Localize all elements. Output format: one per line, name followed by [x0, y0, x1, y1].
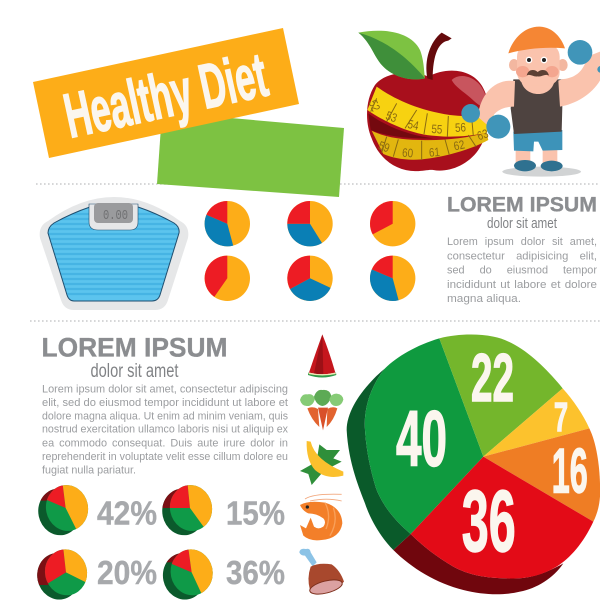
percent labels: 42%	[97, 495, 157, 532]
text block: lower left: nostrud exercitation ullamco laboris nisi ut aliquip ex	[42, 424, 288, 436]
pie 42%	[38, 485, 88, 536]
pie 3	[370, 201, 415, 246]
icon: strongman with dumbbells	[461, 27, 600, 177]
slice 36	[411, 457, 593, 579]
text block: upper right: Lorem ipsum dolor sit amet,	[447, 236, 597, 248]
text block: lower left: fugiat nulla pariatur.	[42, 464, 136, 476]
icon: apple with measuring tape: 52	[365, 98, 382, 114]
pie 20%	[37, 549, 88, 600]
label 40: 40	[396, 394, 447, 482]
icon: apple with measuring tape: 54	[406, 118, 420, 133]
icon: apple with measuring tape: 63	[476, 128, 490, 144]
text block: upper right: incididunt ut labore et dolore	[447, 279, 597, 291]
icon: banana and leaves	[300, 441, 343, 485]
percent labels: 20%	[97, 554, 157, 591]
text block: lower left: Lorem ipsum dolor sit amet, consectetur adipiscing	[42, 383, 288, 395]
text block: upper right: sed do eiusmod tempor	[447, 265, 597, 277]
pie 5	[287, 256, 333, 301]
dark red side	[393, 534, 563, 594]
text block: lower left: elit, sed do eiusmod tempor incididunt ut labore et	[42, 397, 288, 409]
percent pies	[34, 481, 223, 600]
icon: apple with measuring tape: 60	[402, 147, 413, 161]
text block: upper right: magna aliqua.	[447, 293, 521, 305]
icon: shrimp	[300, 494, 342, 540]
label 36: 36	[462, 473, 516, 570]
icon: apple with measuring tape: 56	[455, 121, 466, 135]
label 22: 22	[471, 340, 514, 416]
text block: upper right: dolor sit amet	[487, 215, 558, 232]
icon: bathroom scale	[40, 197, 188, 310]
percent labels	[97, 495, 285, 591]
text block: upper right: consectetur adipisicing elit,	[447, 250, 597, 262]
text block: lower left: dolore magna aliqua. Ut enim ad minim veniam, quis	[42, 410, 288, 422]
icon: apple with measuring tape: 62	[453, 138, 466, 154]
icon: apple with measuring tape: 59	[376, 139, 391, 156]
percent labels: 15%	[226, 495, 285, 532]
percent labels: 36%	[226, 554, 285, 591]
slice 7	[483, 388, 589, 457]
text block: lower left: LOREM IPSUM	[42, 332, 228, 362]
pie grid	[205, 201, 415, 301]
icon: apple with measuring tape: 53	[384, 109, 399, 126]
slice 16	[483, 428, 600, 522]
text block: upper right: LOREM IPSUM	[447, 194, 597, 216]
slice 40	[365, 338, 483, 534]
label 7: 7	[554, 394, 568, 440]
icon: watermelon	[308, 334, 336, 377]
pie 2	[287, 201, 333, 246]
pie 6	[370, 256, 415, 301]
pie labels	[396, 340, 588, 570]
title: Healthy Diet: Healthy Diet	[58, 40, 273, 152]
text block: lower left: ea commodo consequat. Duis aute irure dolor in	[42, 437, 288, 449]
green banner	[157, 112, 344, 197]
text block: lower left	[42, 332, 288, 476]
title banner	[33, 28, 299, 158]
icon: carrots	[300, 390, 343, 430]
icon: apple with measuring tape	[358, 31, 496, 171]
icon: ham	[299, 549, 344, 597]
pie 36%	[162, 549, 213, 600]
dark green side	[347, 368, 411, 550]
text block: lower left: reprehenderit in voluptate velit esse cillum dolore eu	[42, 451, 288, 463]
big 3D pie chart	[347, 335, 600, 594]
text block: lower left: dolor sit amet	[90, 361, 179, 382]
icon: apple with measuring tape: 55	[431, 123, 443, 137]
text block: upper right	[447, 194, 597, 305]
pie 4	[205, 256, 250, 301]
slice 22	[439, 335, 563, 457]
icon: bathroom scale: 0.00	[103, 208, 128, 224]
pie 15%	[162, 485, 212, 536]
icon: apple with measuring tape: 61	[428, 146, 440, 160]
pie 1	[205, 201, 250, 246]
food icons	[299, 334, 344, 597]
